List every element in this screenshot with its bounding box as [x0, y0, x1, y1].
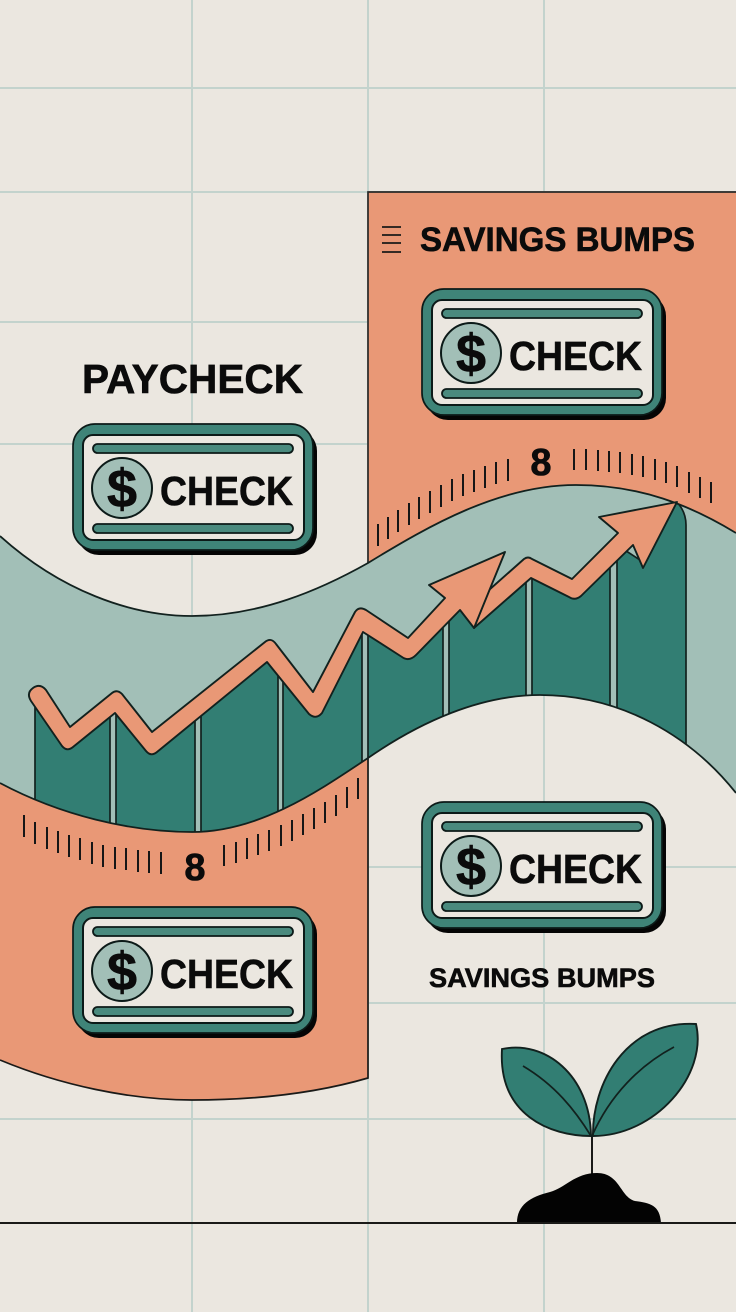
check card: paycheck: CHECK [160, 468, 293, 514]
panel: teal wave band [0, 485, 736, 832]
icon: menu lines [382, 227, 401, 252]
check card: paycheck: $ [107, 459, 137, 519]
wave outlines [0, 485, 736, 832]
panel: orange lower left [0, 758, 368, 1100]
heading: paycheck: PAYCHECK [82, 356, 303, 402]
ticks: lower right [224, 778, 358, 866]
check card: savings lower: $ [456, 837, 486, 897]
panel: orange upper right [368, 192, 736, 563]
heading: savings bumps: SAVINGS BUMPS [420, 221, 695, 259]
ticks: upper left [378, 459, 508, 546]
ground line [0, 1222, 736, 1224]
arrow: first rising segment [29, 552, 505, 754]
arrow: second rising segment [474, 502, 677, 628]
ticks: upper right [574, 449, 711, 503]
bar chart [35, 502, 686, 860]
check card: savings lower [422, 802, 666, 933]
number: upper 8: 8 [530, 442, 552, 484]
check card: paycheck lower [73, 907, 317, 1038]
number: lower 8: 8 [184, 847, 206, 889]
check card: paycheck lower: $ [107, 942, 137, 1002]
check card: savings lower: CHECK [509, 846, 642, 892]
icon: sprout plant [502, 1024, 698, 1223]
check card: paycheck lower: CHECK [160, 951, 293, 997]
label: savings bumps lower: SAVINGS BUMPS [429, 963, 655, 993]
check card: savings upper: CHECK [509, 333, 642, 379]
check card: paycheck [73, 424, 317, 555]
check card: savings upper [422, 289, 666, 420]
ticks: lower left [24, 815, 161, 874]
check card: savings upper: $ [456, 324, 486, 384]
